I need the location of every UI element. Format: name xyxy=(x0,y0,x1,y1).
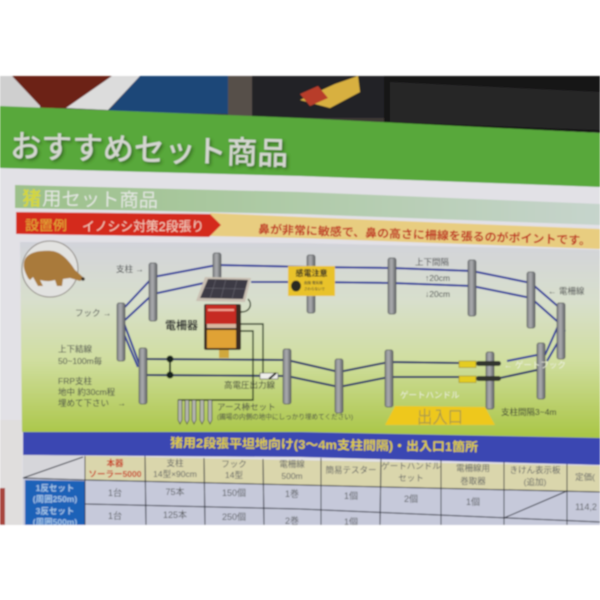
table header labels: 電柵線用 xyxy=(456,463,490,473)
icon: wild boar xyxy=(22,241,85,297)
table header labels: 簡易テスター xyxy=(325,465,377,475)
fence wires: back xyxy=(118,265,565,374)
table values row 2: 2巻 xyxy=(285,515,299,526)
table values row 2: 125本 xyxy=(163,509,187,520)
table title band xyxy=(23,432,600,465)
table header labels: 14型×90cm xyxy=(153,469,197,479)
left margin xyxy=(0,420,22,525)
table values row 1: 1台 xyxy=(108,487,122,498)
table header labels: (追加) xyxy=(524,477,546,487)
table values row 1: 75本 xyxy=(165,486,185,497)
table values row 1: 114,2 xyxy=(575,502,597,512)
energizer label: 電柵器 xyxy=(165,319,198,332)
table values row 2: 250個 xyxy=(222,511,246,522)
table row headers xyxy=(33,483,77,527)
title: おすすめセット商品 xyxy=(10,129,289,172)
warning sign: さわらないで xyxy=(304,286,325,291)
table title band: 猪用2段張平坦地向け(3～4m支柱間隔)・出入口1箇所 xyxy=(170,435,479,454)
red installation label: イノシシ対策2段張り xyxy=(82,219,204,234)
table row headers: 1反セット xyxy=(36,483,74,493)
background photo strip xyxy=(0,76,600,136)
red installation label: 設置例 xyxy=(25,218,67,233)
solar panel xyxy=(196,277,251,302)
diagram labels: 地中 約30cm程 xyxy=(58,387,116,397)
key point band: 鼻が非常に敏感で、鼻の高さに柵線を張るのがポイントです。 xyxy=(258,222,591,248)
table header labels: 巻取器 xyxy=(460,476,486,486)
warning sign xyxy=(288,266,335,296)
table values row 1: 1個 xyxy=(344,490,358,501)
entrance marker: 出入口 xyxy=(417,408,463,427)
diagram labels: 支柱 → xyxy=(116,264,144,274)
table header labels xyxy=(89,458,595,487)
table row headers: (周囲250m) xyxy=(33,494,77,504)
diagram labels: 高電圧出力線 xyxy=(224,380,276,390)
earth rods xyxy=(178,400,212,424)
entrance marker xyxy=(385,406,495,427)
warning sign: 危険 電気柵 xyxy=(304,280,323,285)
table header labels: 支柱 xyxy=(166,458,184,468)
energizer unit xyxy=(204,304,241,358)
table row headers: (周囲500m) xyxy=(33,517,77,527)
section heading band xyxy=(15,185,600,225)
gate handles xyxy=(459,361,501,382)
warning sign: 感電注意 xyxy=(296,268,328,278)
diagram labels: 50~100m毎 xyxy=(58,356,103,366)
diagram labels: アース棒セット xyxy=(217,402,276,412)
price table xyxy=(23,455,600,527)
key point band xyxy=(210,213,600,249)
diagram labels: ↑20cm xyxy=(425,273,450,283)
section heading band: 猪 xyxy=(22,188,41,210)
table values row 1: 150個 xyxy=(222,487,246,498)
table header labels: ソーラー5000 xyxy=(89,469,142,479)
table header labels: 500m xyxy=(281,471,303,481)
diagram labels: 埋めて下さい → xyxy=(58,398,126,408)
high-voltage connector xyxy=(260,373,278,379)
diagram labels: ゲートハンドル xyxy=(400,390,460,400)
energizer wiring xyxy=(170,299,263,400)
green title band xyxy=(0,106,600,187)
diagram labels: (圃場の内側の地中にしっかり埋めてください) xyxy=(217,412,353,421)
fence posts xyxy=(117,253,565,413)
table values row 1: 1個 xyxy=(466,496,480,507)
table header labels: 本器 xyxy=(106,458,124,468)
table header labels: 14型 xyxy=(225,470,243,480)
table values row 1: 1巻 xyxy=(285,488,299,499)
red installation label xyxy=(16,212,221,237)
junction dots xyxy=(166,356,174,378)
section heading band: 用セット商品 xyxy=(42,188,158,212)
table header labels: フック xyxy=(221,459,247,469)
table values row 1: 2個 xyxy=(404,493,418,504)
diagram labels: 支柱間隔3~4m xyxy=(501,407,556,417)
diagram labels: 上下間隔 xyxy=(415,257,449,267)
table values row 2: 1個 xyxy=(344,516,358,527)
diagram labels: ← 電柵線 xyxy=(548,286,585,296)
diagram background xyxy=(20,242,600,438)
diagram labels xyxy=(58,257,585,421)
table header labels: 定価( xyxy=(575,472,595,482)
diagram labels: ← ゲートフック xyxy=(504,360,566,370)
table row headers: 3反セット xyxy=(36,506,74,516)
table values row 2: 1台 xyxy=(108,510,122,521)
table header labels: セット xyxy=(398,473,424,483)
diagram labels: ↓20cm xyxy=(425,289,450,299)
diagram labels: 上下結線 xyxy=(58,344,93,354)
diagram labels: FRP支柱 xyxy=(58,376,93,386)
table header labels: 電柵線 xyxy=(279,459,305,469)
table header labels: きけん表示板 xyxy=(509,465,561,475)
table values row 1 xyxy=(108,486,597,512)
table header labels: ゲートハンドル xyxy=(381,461,441,471)
fence wires: front xyxy=(143,359,537,387)
diagram labels: フック → xyxy=(75,308,111,318)
white bottom margin xyxy=(0,525,600,600)
page base xyxy=(0,106,600,525)
table values row 2 xyxy=(108,509,358,527)
